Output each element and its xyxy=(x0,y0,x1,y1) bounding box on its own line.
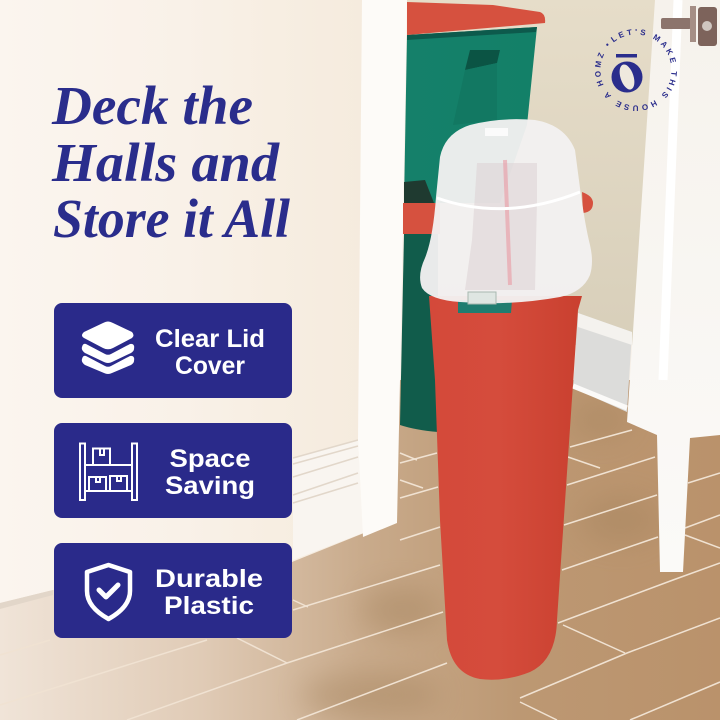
left floor skirting xyxy=(0,590,53,609)
label: Cover xyxy=(175,352,245,380)
floor shading xyxy=(300,402,660,717)
door on the right xyxy=(627,0,720,572)
floor planks xyxy=(0,430,720,720)
closet back wall xyxy=(407,0,657,345)
title: Halls and xyxy=(51,132,281,193)
feature: clear lid cover xyxy=(54,303,292,398)
lid ridge xyxy=(437,192,580,209)
label: Space xyxy=(170,445,251,473)
upper green bin xyxy=(404,27,537,203)
label xyxy=(165,445,255,500)
wood floor xyxy=(0,380,720,720)
title: Store it All xyxy=(53,188,291,249)
title xyxy=(51,75,291,249)
white door frame xyxy=(358,0,407,537)
title: Deck the xyxy=(51,75,253,136)
label xyxy=(155,325,265,380)
feature: durable plastic xyxy=(54,543,292,638)
door handle xyxy=(661,6,717,46)
upper red lid xyxy=(407,2,545,35)
latch slot xyxy=(468,292,496,304)
label: Plastic xyxy=(164,592,254,620)
label: Clear Lid xyxy=(155,325,265,353)
feature: space saving xyxy=(54,423,292,518)
icon: shelves with boxes xyxy=(80,444,137,500)
circular slogan: LET'S MAKE THIS HOUSE A HOMZ • xyxy=(595,29,677,111)
icon: stacked layers xyxy=(82,322,134,374)
dark shadow above lower lid xyxy=(404,180,434,203)
label: Saving xyxy=(165,472,255,500)
icon: shield with check xyxy=(87,565,130,619)
left wall xyxy=(0,0,364,603)
logo badge xyxy=(595,29,677,111)
lid contents xyxy=(465,163,537,290)
logo mark xyxy=(612,54,642,92)
bin handle recess xyxy=(465,50,500,70)
lower red lid xyxy=(403,203,440,234)
teal latch xyxy=(458,300,512,313)
lower green bin xyxy=(400,234,438,432)
product: red wrapping paper storage bin xyxy=(420,119,592,680)
label: Durable xyxy=(155,565,263,593)
left baseboard xyxy=(293,440,363,560)
red base xyxy=(429,296,582,680)
closet baseboard xyxy=(573,313,632,412)
label xyxy=(155,565,263,620)
clear lid xyxy=(420,119,592,304)
green storage bins with red lids xyxy=(400,2,593,432)
